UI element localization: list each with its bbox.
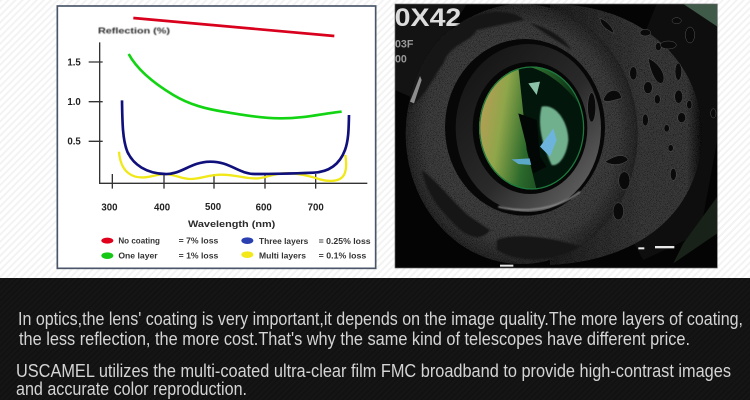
text block: USCAMEL coating: and accurate color reproduction. bbox=[16, 379, 247, 399]
chart axis title: Reflection (%) bbox=[98, 26, 170, 36]
legend bbox=[101, 236, 371, 260]
lens bbox=[477, 63, 587, 193]
legend: = 0.25% loss bbox=[319, 237, 371, 246]
x axis labels: 500 bbox=[205, 202, 221, 213]
legend: = 0.1% loss bbox=[319, 251, 367, 260]
legend: = 1% loss bbox=[179, 251, 219, 260]
water droplets bbox=[588, 18, 716, 220]
background body bbox=[634, 4, 717, 260]
y axis labels: 1.5 bbox=[67, 57, 81, 68]
line: three layers bbox=[122, 100, 349, 174]
x axis labels: 700 bbox=[308, 203, 324, 214]
x axis labels: 600 bbox=[256, 203, 272, 214]
y axis labels: 1.0 bbox=[67, 97, 81, 108]
x axis title: Wavelength (nm) bbox=[188, 219, 275, 229]
panel: photo of wet eyepiece bbox=[395, 4, 717, 268]
x axis labels bbox=[101, 202, 324, 214]
rubber eyecup bbox=[406, 4, 702, 265]
legend: Three layers bbox=[259, 237, 309, 246]
panel: reflection chart bbox=[57, 6, 376, 268]
inner bezel ring bbox=[445, 39, 605, 216]
text block: coating explanation bbox=[18, 309, 743, 349]
legend: No coating bbox=[118, 236, 160, 245]
legend: = 7% loss bbox=[179, 236, 219, 245]
x axis labels: 400 bbox=[154, 203, 170, 214]
specular glints bbox=[410, 76, 674, 267]
text block: USCAMEL coating bbox=[16, 361, 731, 399]
x axis labels: 300 bbox=[101, 203, 117, 214]
product label on housing bbox=[395, 4, 467, 97]
product label on housing: 00 bbox=[395, 54, 407, 66]
line: no coating bbox=[133, 18, 334, 36]
text block: coating explanation: the less reflection, the more cost.That's why the same kind of telescopes have different price. bbox=[19, 329, 690, 349]
chart axes bbox=[89, 42, 367, 189]
legend: One layer bbox=[118, 251, 158, 260]
line: one layer bbox=[129, 54, 342, 118]
bezel highlight bbox=[498, 192, 580, 210]
product label on housing: 03F bbox=[395, 38, 414, 50]
product label on housing: 0X42 bbox=[395, 5, 461, 32]
panel: dark text band bbox=[0, 278, 750, 400]
legend: Multi layers bbox=[259, 251, 307, 260]
y axis labels: 0.5 bbox=[67, 137, 81, 148]
y axis labels bbox=[67, 57, 81, 148]
line: multi layers bbox=[119, 152, 346, 181]
wet patches bbox=[410, 12, 580, 260]
